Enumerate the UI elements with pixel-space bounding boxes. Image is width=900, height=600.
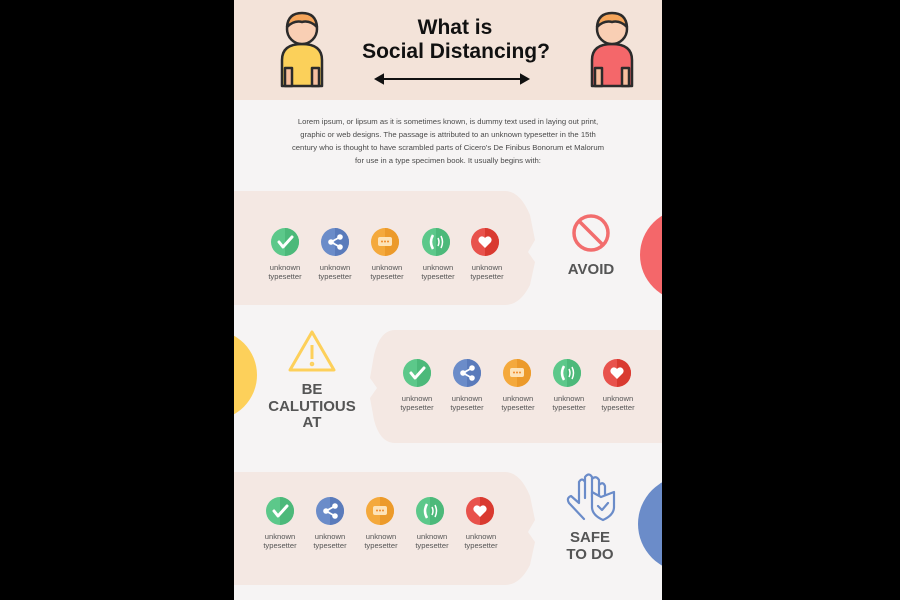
panel: cautious: typesetter bbox=[601, 403, 635, 412]
arrow bbox=[376, 75, 528, 83]
panel: avoid: typesetter bbox=[268, 272, 302, 281]
panel: avoid bbox=[234, 191, 535, 305]
panel: avoid: typesetter bbox=[421, 272, 455, 281]
panel: avoid: unknown bbox=[372, 263, 402, 272]
yellow circle bbox=[234, 336, 257, 414]
panel: avoid: typesetter bbox=[370, 272, 404, 281]
panel: cautious: unknown bbox=[402, 394, 432, 403]
panel: safe: typesetter bbox=[263, 541, 297, 550]
panel: safe: typesetter bbox=[364, 541, 398, 550]
panel: safe: unknown bbox=[366, 532, 396, 541]
panel: cautious: typesetter bbox=[450, 403, 484, 412]
intro paragraph: century who is thought to have scrambled parts of Cicero's De Finibus Bonorum et Malorum bbox=[292, 143, 604, 152]
panel: avoid: unknown bbox=[320, 263, 350, 272]
intro paragraph: graphic or web designs. The passage is attributed to an unknown typesetter in the 15th bbox=[300, 130, 596, 139]
person left bbox=[282, 13, 322, 86]
panel: cautious: unknown bbox=[452, 394, 482, 403]
panel: safe: unknown bbox=[466, 532, 496, 541]
title bbox=[362, 16, 550, 63]
icon: hand shield bbox=[568, 474, 614, 520]
panel: safe: unknown bbox=[315, 532, 345, 541]
title: What is bbox=[418, 16, 492, 39]
safe label bbox=[566, 532, 613, 559]
red circle bbox=[640, 216, 662, 294]
panel: avoid: typesetter bbox=[318, 272, 352, 281]
panel: avoid: unknown bbox=[423, 263, 453, 272]
blue circle bbox=[638, 482, 662, 566]
safe label: SAFE bbox=[570, 529, 610, 546]
panel: avoid: typesetter bbox=[470, 272, 504, 281]
panel: safe bbox=[234, 472, 535, 585]
panel: safe: typesetter bbox=[415, 541, 449, 550]
icon: no sign bbox=[574, 216, 608, 250]
panel: safe: unknown bbox=[417, 532, 447, 541]
panel: cautious: typesetter bbox=[501, 403, 535, 412]
panel: cautious: unknown bbox=[554, 394, 584, 403]
intro paragraph bbox=[292, 117, 604, 165]
intro paragraph: for use in a type specimen book. It usually begins with: bbox=[355, 156, 541, 165]
panel: safe: typesetter bbox=[313, 541, 347, 550]
person right bbox=[592, 13, 632, 86]
avoid label: AVOID bbox=[568, 261, 614, 278]
cautious label: BE bbox=[302, 381, 322, 398]
panel: avoid: unknown bbox=[472, 263, 502, 272]
panel: safe: unknown bbox=[265, 532, 295, 541]
panel: cautious: typesetter bbox=[400, 403, 434, 412]
safe label: TO DO bbox=[566, 546, 614, 563]
header band bbox=[234, 0, 662, 100]
panel: cautious: unknown bbox=[603, 394, 633, 403]
panel: cautious: unknown bbox=[503, 394, 533, 403]
icon: warning bbox=[290, 332, 334, 370]
panel: safe: typesetter bbox=[464, 541, 498, 550]
cautious label bbox=[268, 384, 356, 427]
title: Social Distancing? bbox=[362, 40, 550, 63]
panel: cautious: typesetter bbox=[552, 403, 586, 412]
intro paragraph: Lorem ipsum, or lipsum as it is sometimes known, is dummy text used in laying out print, bbox=[298, 117, 598, 126]
panel: avoid: unknown bbox=[270, 263, 300, 272]
panel: cautious bbox=[370, 330, 662, 443]
cautious label: CALUTIOUS bbox=[268, 398, 356, 415]
cautious label: AT bbox=[303, 414, 321, 431]
